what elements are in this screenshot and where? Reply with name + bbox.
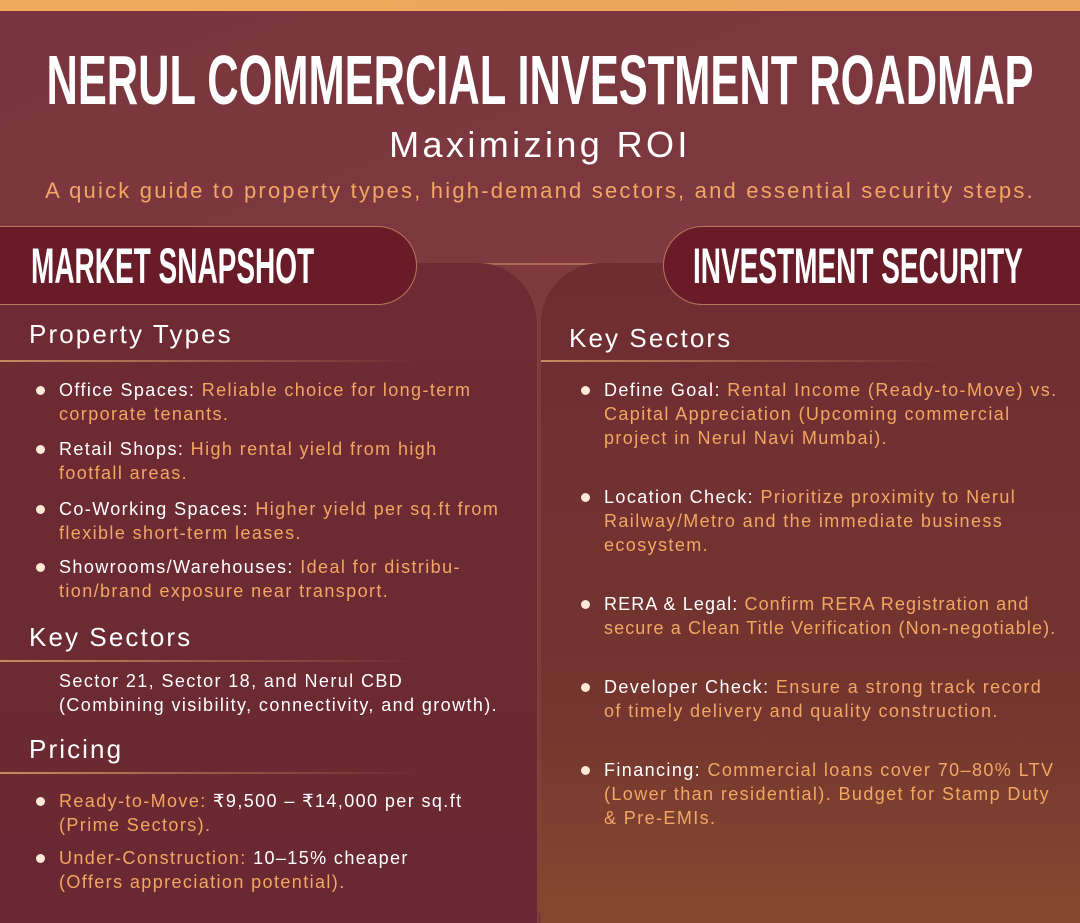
bullet: coworking: flexible short-term leases. [59,523,302,543]
heading: property types: Property Types [29,319,233,349]
bullet: location [581,487,1016,555]
subtitle: Maximizing ROI [389,124,691,165]
key sectors text: Sector 21, Sector 18, and Nerul CBD [59,671,403,691]
heading: key sectors: Key Sectors [569,323,732,353]
pill: investment security: INVESTMENT SECURITY [693,238,1023,294]
bullet: financing [581,760,1054,828]
panel: market snapshot [0,263,538,923]
heading: pricing: Pricing [29,734,123,764]
bullet: ready to move: Ready-to-Move: ₹9,500 – ₹14,000 per sq.ft [59,791,463,811]
bullet: rera: RERA & Legal: Confirm RERA Registration and [604,594,1029,614]
bullet: define goal [581,380,1058,448]
bullet: rera: secure a Clean Title Verification (Non-negotiable). [604,618,1056,638]
bullet: retail: Retail Shops: High rental yield from high [59,439,438,459]
pill: market snapshot [0,226,417,305]
tagline: A quick guide to property types, high-demand sectors, and essential security steps. [45,178,1035,203]
bullet: coworking [36,499,499,543]
bullet: location: Railway/Metro and the immediate business [604,511,1003,531]
bullet: showrooms [36,557,461,601]
title: NERUL COMMERCIAL INVESTMENT ROADMAP [47,41,1033,119]
key sectors text: (Combining visibility, connectivity, and growth). [59,695,498,715]
bullet: under construction [36,848,409,892]
bullet: office: Office Spaces: Reliable choice for long-term [59,380,471,400]
bullet: developer: Developer Check: Ensure a strong track record [604,677,1042,697]
bullet: office [36,380,471,424]
bullet: showrooms: tion/brand exposure near transport. [59,581,389,601]
bullet: retail: footfall areas. [59,463,188,483]
bullet: financing: (Lower than residential). Budget for Stamp Duty [604,784,1050,804]
bullet: retail [36,439,438,483]
top bar [0,0,1080,11]
bullet: location: ecosystem. [604,535,709,555]
pill: market snapshot: MARKET SNAPSHOT [31,238,314,294]
bullet: under construction: (Offers appreciation potential). [59,872,346,892]
bullet: financing: Financing: Commercial loans cover 70–80% LTV [604,760,1054,780]
panel: investment security [541,263,1080,923]
bullet: rera [581,594,1056,638]
bullet: define goal: Capital Appreciation (Upcoming commercial [604,404,1011,424]
heading: key sectors: Key Sectors [29,622,192,652]
pill: investment security [663,226,1080,305]
bullet: location: Location Check: Prioritize proximity to Nerul [604,487,1016,507]
bullet: developer: of timely delivery and quality construction. [604,701,999,721]
bullet: ready to move: (Prime Sectors). [59,815,211,835]
bullet: define goal: project in Nerul Navi Mumbai). [604,428,888,448]
key sectors text [59,671,498,715]
bullet: under construction: Under-Construction: 10–15% cheaper [59,848,409,868]
bullet: coworking: Co-Working Spaces: Higher yield per sq.ft from [59,499,499,519]
bullet: office: corporate tenants. [59,404,229,424]
bullet: financing: & Pre-EMIs. [604,808,716,828]
bullet: showrooms: Showrooms/Warehouses: Ideal for distribu- [59,557,461,577]
bullet: developer [581,677,1042,721]
connector lines [417,263,663,265]
bullet: define goal: Define Goal: Rental Income (Ready-to-Move) vs. [604,380,1058,400]
bullet: ready to move [36,791,463,835]
